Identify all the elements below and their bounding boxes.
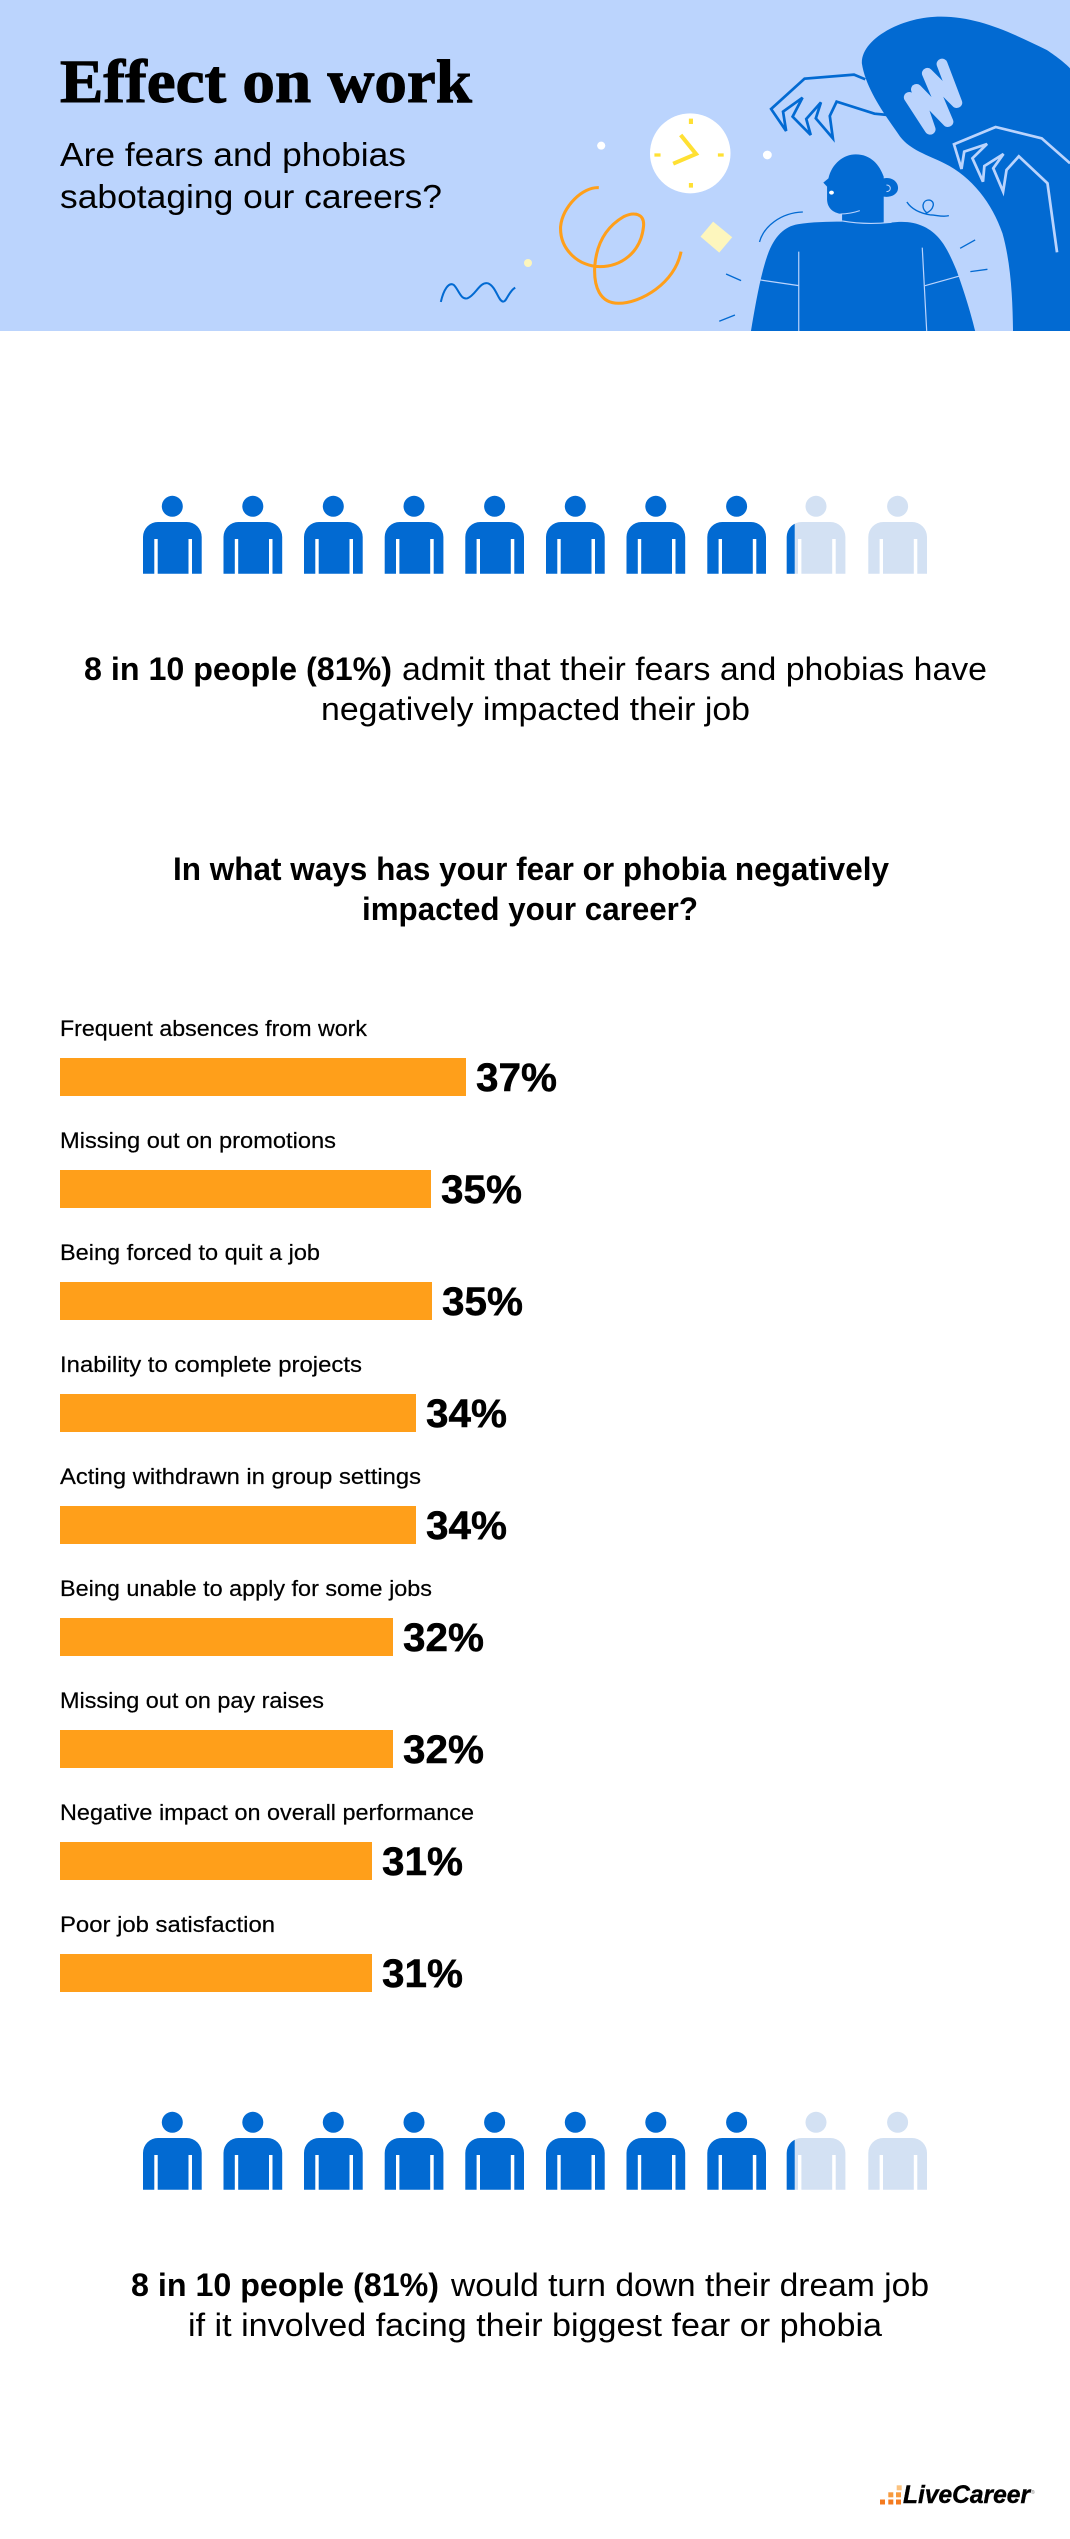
bar: acting withdrawn bbox=[60, 1464, 507, 1548]
heading: bar chart question: impacted your career? bbox=[362, 891, 698, 927]
bar: pay raises: 32% bbox=[403, 1728, 484, 1772]
icon: monster bbox=[771, 17, 1070, 331]
bar: acting withdrawn: 34% bbox=[426, 1504, 507, 1548]
bar: frequent absences bbox=[60, 1016, 557, 1100]
icon: person bbox=[719, 154, 987, 331]
bar: forced to quit: 35% bbox=[442, 1280, 523, 1324]
icon: wavy line bbox=[441, 283, 515, 302]
bar: frequent absences: 37% bbox=[476, 1056, 557, 1100]
bar: frequent absences: Frequent absences from work bbox=[60, 1016, 368, 1041]
text block: 81% would turn down dream job: 8 in 10 people (81%) bbox=[131, 2267, 439, 2303]
bar chart: negative career impacts bbox=[60, 1016, 557, 1996]
subtitle: sabotaging our careers? bbox=[60, 178, 442, 215]
bar: acting withdrawn: Acting withdrawn in group settings bbox=[60, 1464, 421, 1489]
bar: job satisfaction: Poor job satisfaction bbox=[60, 1912, 275, 1937]
icon: small yellow dot bbox=[524, 259, 532, 267]
bar: pay raises: Missing out on pay raises bbox=[60, 1688, 324, 1713]
bar: overall performance: Negative impact on overall performance bbox=[60, 1800, 474, 1825]
logo: LiveCareer: ® bbox=[1031, 2489, 1035, 2496]
icon: clock bbox=[650, 113, 731, 193]
text block: 81% admit negative impact bbox=[84, 651, 987, 727]
bar: overall performance bbox=[60, 1800, 474, 1884]
logo: LiveCareer: LiveCareer bbox=[903, 2481, 1031, 2509]
subtitle bbox=[60, 136, 442, 215]
bar: unable to apply: Being unable to apply for some jobs bbox=[60, 1576, 432, 1601]
title: Effect on work bbox=[60, 49, 472, 116]
text block: 81% would turn down dream job bbox=[131, 2267, 929, 2343]
bar: unable to apply bbox=[60, 1576, 484, 1660]
bar: forced to quit: Being forced to quit a job bbox=[60, 1240, 320, 1265]
bar: missing promotions: Missing out on promotions bbox=[60, 1128, 336, 1153]
icon: white dots bbox=[597, 142, 772, 159]
heading: bar chart question: In what ways has your fear or phobia negatively bbox=[173, 851, 889, 887]
text block: 81% would turn down dream job: if it involved facing their biggest fear or phobia bbox=[188, 2307, 882, 2343]
text block: 81% admit negative impact: negatively impacted their job bbox=[321, 691, 750, 727]
pictogram: 8 in 10 people, top bbox=[143, 496, 927, 574]
bar: incomplete projects: Inability to complete projects bbox=[60, 1352, 362, 1377]
text block: 81% admit negative impact: 8 in 10 people (81%) bbox=[84, 651, 392, 687]
bar: unable to apply: 32% bbox=[403, 1616, 484, 1660]
bar: missing promotions bbox=[60, 1128, 522, 1212]
bar: overall performance: 31% bbox=[382, 1840, 463, 1884]
bar: job satisfaction bbox=[60, 1912, 463, 1996]
bar: pay raises bbox=[60, 1688, 484, 1772]
bar: missing promotions: 35% bbox=[441, 1168, 522, 1212]
subtitle: Are fears and phobias bbox=[60, 136, 406, 173]
bar: incomplete projects bbox=[60, 1352, 507, 1436]
illustration: person, monster and clock bbox=[561, 17, 1070, 331]
bar: incomplete projects: 34% bbox=[426, 1392, 507, 1436]
panel: header banner bbox=[0, 0, 1070, 331]
bar: forced to quit bbox=[60, 1240, 523, 1324]
icon: orange scribble bbox=[561, 188, 681, 303]
pictogram: 8 in 10 people, bottom bbox=[143, 2112, 927, 2190]
icon: yellow diamond bbox=[700, 222, 732, 253]
text block: 81% would turn down dream job: would turn down their dream job bbox=[450, 2267, 929, 2303]
bar: job satisfaction: 31% bbox=[382, 1952, 463, 1996]
text block: 81% admit negative impact: admit that their fears and phobias have bbox=[402, 651, 987, 687]
heading: bar chart question bbox=[173, 851, 889, 927]
